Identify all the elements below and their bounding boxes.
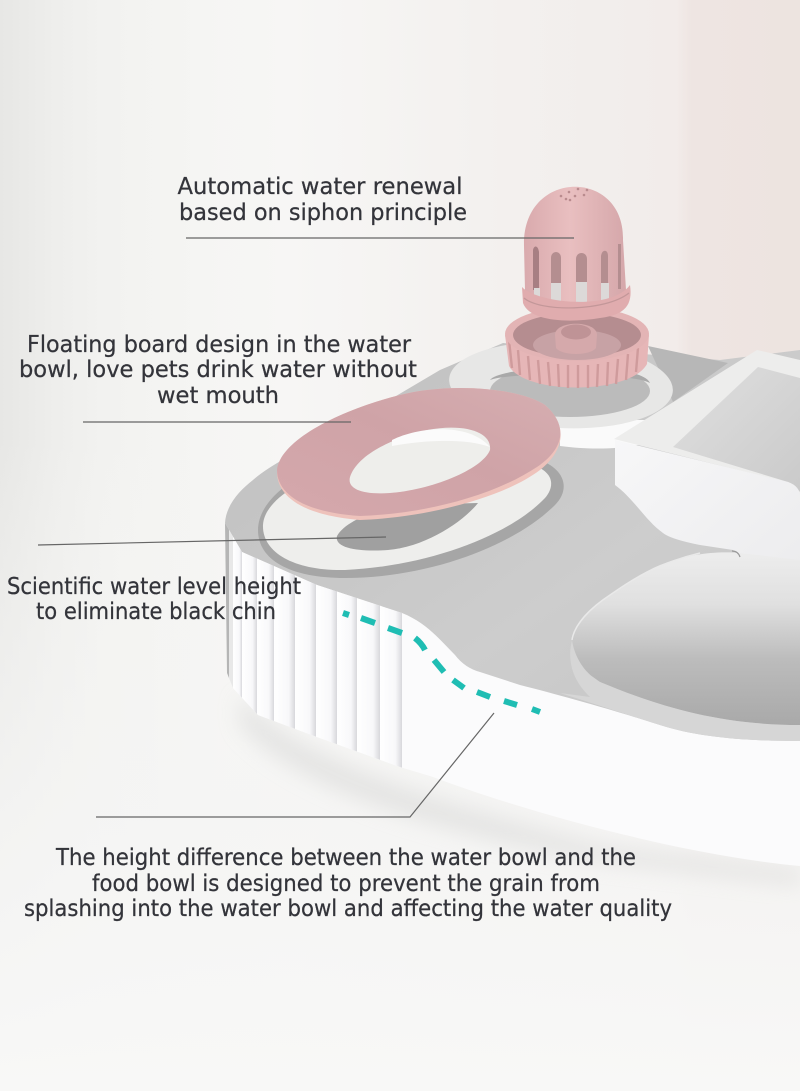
callout: water level: [7, 574, 301, 625]
callout: height difference: The height difference between the water bowl and the: [55, 845, 636, 871]
floating board: [277, 388, 561, 520]
callout: height difference: [24, 845, 672, 922]
board hole: [350, 428, 490, 493]
callout: water level: to eliminate black chin: [36, 599, 276, 625]
cage windows: [533, 246, 539, 290]
shadow under bowl: [240, 695, 800, 885]
grey back panel: [648, 346, 728, 402]
callout leader lines: [38, 238, 574, 817]
icon: dashed height-difference line: [343, 613, 540, 712]
dome holes: [560, 188, 588, 201]
callout: height difference: food bowl is designed to prevent the grain from: [92, 871, 600, 897]
nut cap: [505, 307, 649, 388]
top surface: [225, 343, 800, 750]
callout: floating board: [19, 332, 417, 409]
wall ribs: [225, 523, 402, 768]
callout: automatic water renewal: Automatic water renewal: [178, 174, 462, 200]
callout: floating board: wet mouth: [157, 383, 279, 409]
dome ring: [522, 285, 631, 321]
recess dark opening: [337, 503, 478, 550]
food bowl: [560, 551, 800, 741]
food bowl rim: [560, 640, 800, 741]
outer white wall: [225, 523, 800, 866]
food tray: [614, 350, 800, 600]
callout: height difference: splashing into the water bowl and affecting the water quality: [24, 896, 672, 922]
callout: automatic water renewal: based on siphon principle: [179, 200, 467, 226]
callout: automatic water renewal: [178, 174, 467, 226]
siphon dome: [522, 187, 631, 321]
siphon socket ring: [447, 336, 675, 448]
callout: water level: Scientific water level height: [7, 574, 301, 600]
callout: floating board: bowl, love pets drink water without: [19, 357, 417, 383]
water bowl recess: [258, 460, 564, 578]
illustration: pet bowl base: [224, 336, 800, 885]
callout: floating board: Floating board design in the water: [27, 332, 412, 358]
